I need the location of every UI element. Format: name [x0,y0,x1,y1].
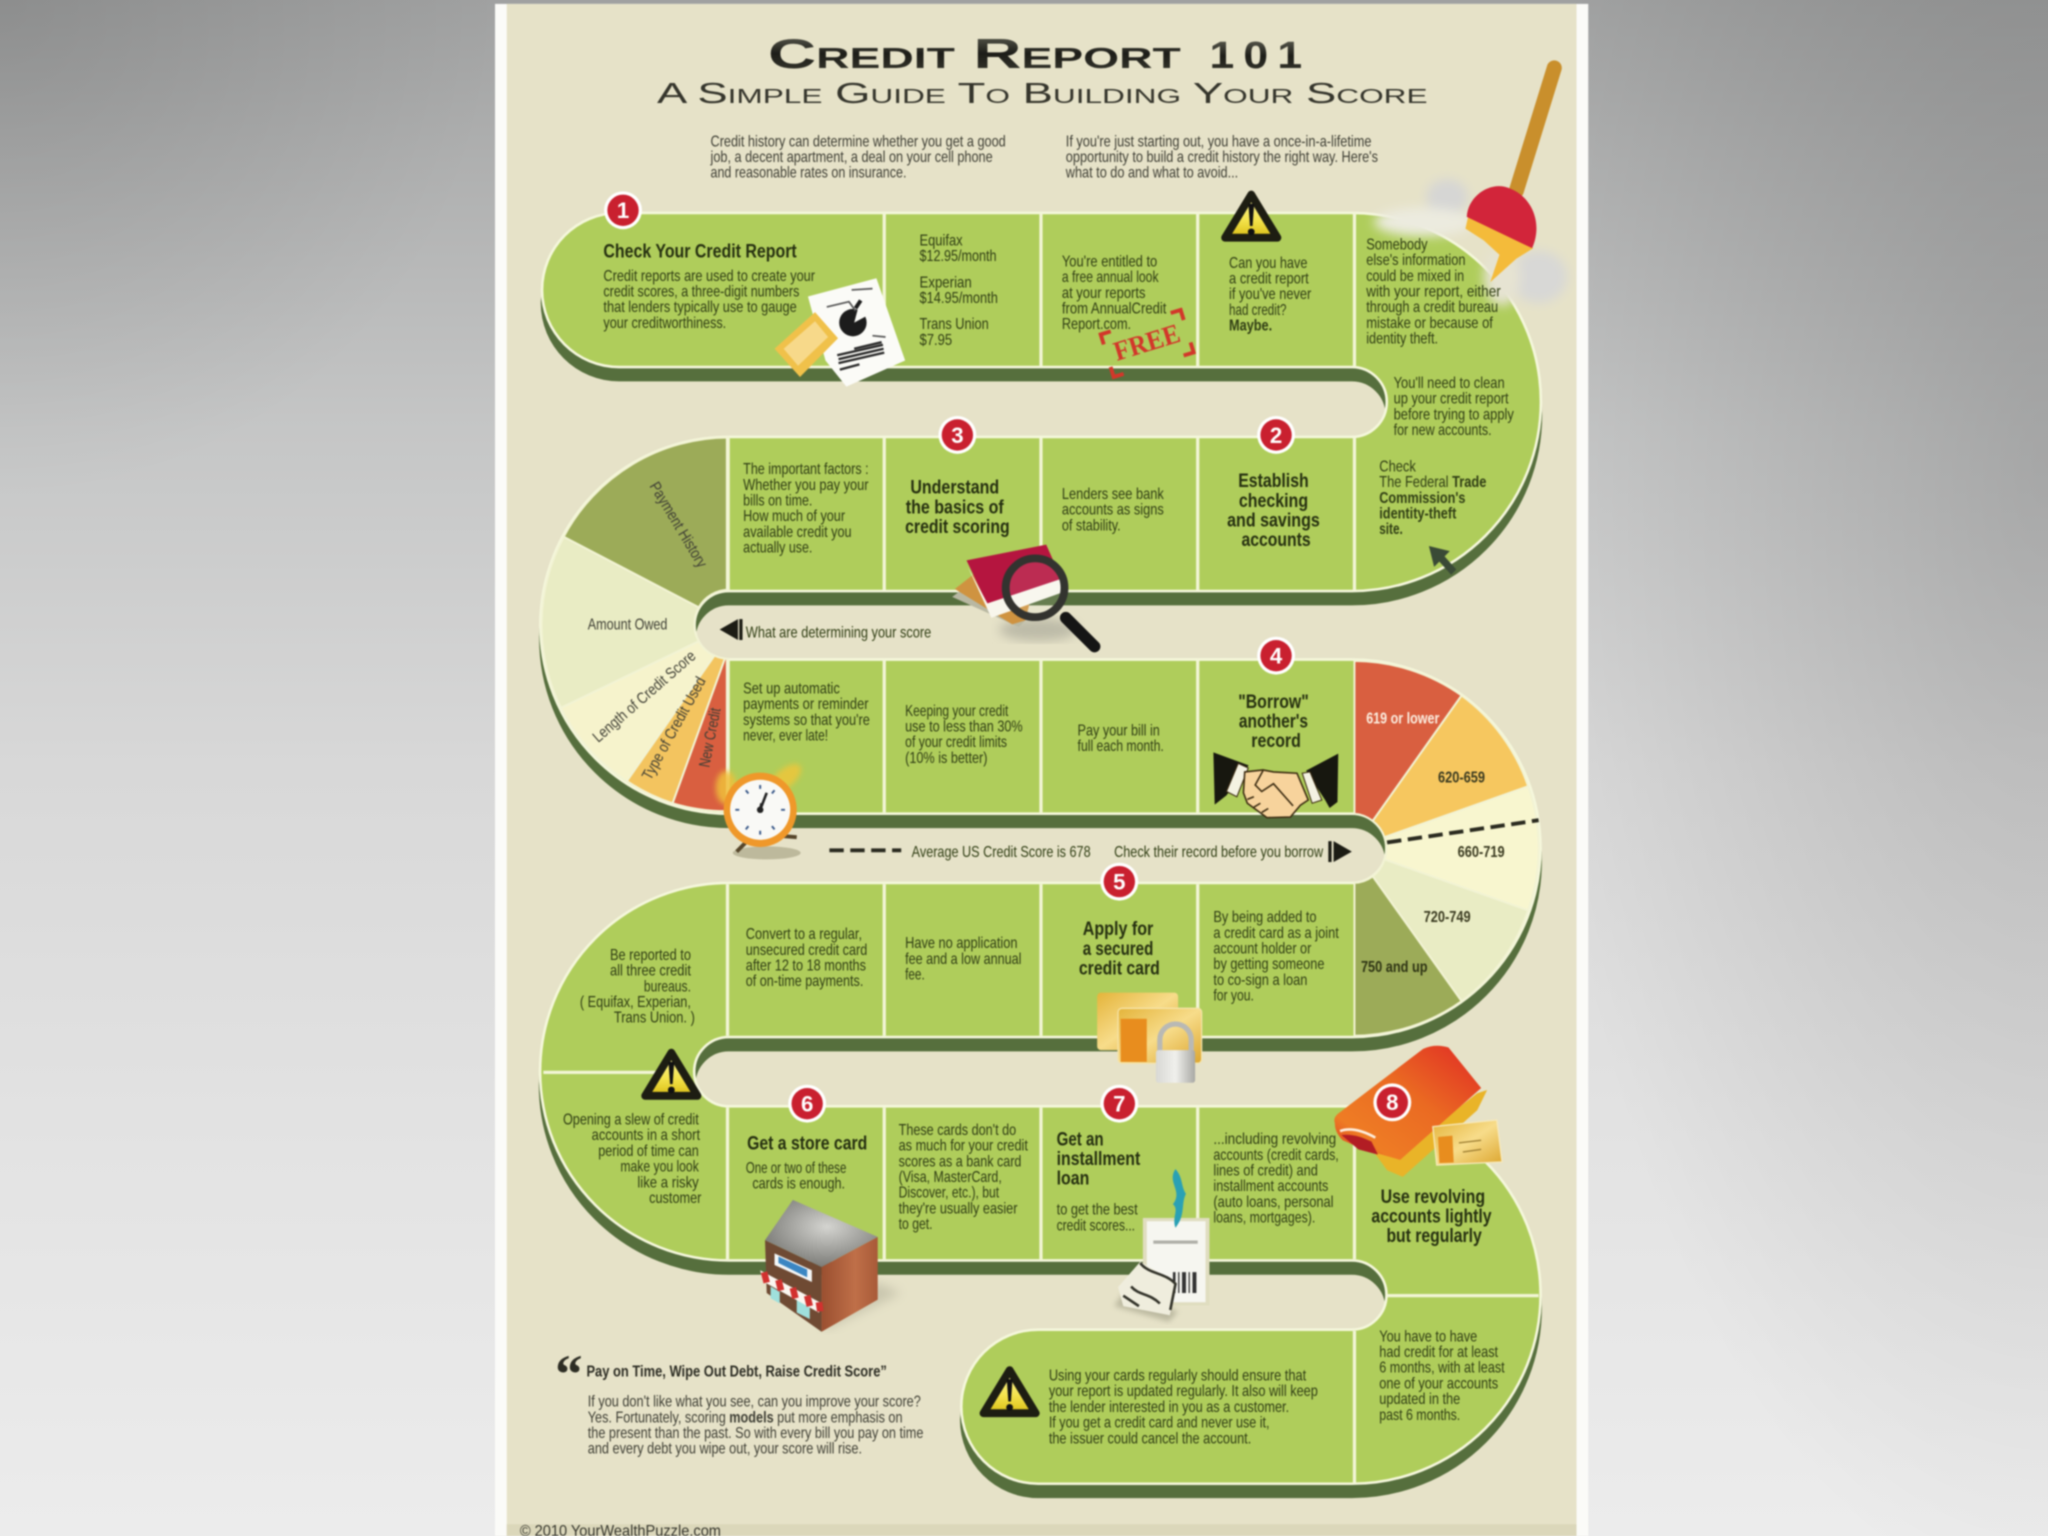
text: store cards vs bank cards: These cards don't do [899,1122,1016,1139]
free annual report text: from AnnualCredit [1062,300,1167,317]
text: credit reports: credit scores, a three-digit numbers [603,283,799,300]
title: Credit Report [768,30,1181,77]
intro text right: opportunity to build a credit history the right way. Here's [1066,149,1378,166]
wedge: payment history [564,438,729,607]
text: opening too many accounts: like a risky [637,1174,699,1191]
icon: cards and padlock [1097,993,1202,1083]
text: joint account holder: By being added to [1213,909,1317,926]
score labels: 750 and up [1361,959,1428,976]
text: federal trade commission [1379,459,1487,538]
wedge: 750 and up [1354,876,1462,1036]
badge 4: 4 [1270,644,1283,669]
text: opening too many accounts: Opening a slew of credit [563,1112,699,1129]
text: keep credit use low: of your credit limits [905,734,1007,751]
text: automatic payments: never, ever late! [743,728,828,745]
text: store cards vs bank cards: Discover, etc.), but [899,1185,1000,1202]
heading: understand the basics of credit scoring: Understand [910,477,999,499]
text: automatic payments: systems so that you're [743,712,870,729]
text: use cards regularly: If you get a credit card and never use it, [1049,1415,1270,1432]
text: one or two: cards is enough. [752,1176,845,1193]
score labels: 619 or lower [1366,711,1439,728]
text: reported to bureaus: all three credit [610,963,691,980]
wedge: 660-719 [1384,786,1539,910]
text: credit reports: that lenders typically use to gauge [603,299,797,316]
heading: get an installment loan [1057,1128,1141,1190]
illustration: broom and dust [1374,68,1567,306]
text: identity mix-up: mistake or because of [1366,315,1493,332]
icon: cursor arrow [1429,546,1456,575]
step 4 [1213,637,1338,818]
text: opening too many accounts [563,1112,701,1207]
text: store cards vs bank cards: (Visa, MasterCard, [899,1169,1002,1186]
pie labels: New Credit [696,706,725,769]
text: clean up report: You'll need to clean [1394,375,1505,392]
heading: apply for a secured credit card: Apply for [1083,918,1154,940]
icon: credit report papers and card [775,278,905,387]
credit bureau prices: $7.95 [920,332,952,349]
pie labels: Length of Credit Score [590,648,700,746]
heading: use revolving accounts lightly but regularly: but regularly [1386,1225,1482,1247]
text: pay in full [1078,722,1164,755]
badge 4 [1257,637,1295,675]
text: reported to bureaus: Trans Union. ) [614,1010,695,1027]
score labels [1361,711,1505,976]
text: keep credit use low: use to less than 30% [905,718,1023,735]
text: convert to regular card: Convert to a regular, [746,926,862,943]
text: keep credit use low [905,703,1023,767]
heading: establish checking and savings accounts: checking [1239,490,1308,512]
pie labels: Amount Owed [588,617,667,634]
text: important factors: How much of your [743,508,845,525]
callout: pay on time quote [555,1343,924,1458]
heading: establish checking and savings accounts: accounts [1241,529,1311,551]
heading: borrow another's record: record [1251,730,1301,752]
text: joint account holder [1213,909,1339,1004]
icon: right arrow [1328,841,1352,862]
quote body [588,1394,924,1458]
text: store cards vs bank cards: to get. [899,1216,933,1233]
wedge: new credit [673,659,729,811]
text: credit report with no credit: Maybe. [1229,317,1272,334]
text: opening too many accounts: accounts in a short [592,1127,701,1144]
text: important factors: bills on time. [743,492,812,509]
text: lenders see bank accounts: accounts as signs [1062,502,1164,519]
icon: warning 1 [1225,195,1277,238]
pie chart: what determines your score [542,438,729,811]
heading: get an installment loan: Get an [1057,1128,1104,1150]
icon: store building [760,1200,901,1332]
pie labels [588,479,725,783]
heading: get a store card: Get a store card [747,1132,867,1154]
text: identity mix-up: with your report, either [1365,283,1501,300]
heading: establish checking and savings accounts [1227,470,1320,551]
text: low fees: fee and a low annual [905,951,1021,968]
average score dashed line [829,820,1539,850]
intro text left: Credit history can determine whether you get a good [711,133,1006,150]
text: store cards vs bank cards: scores as a bank card [899,1153,1021,1170]
intro text left: job, a decent apartment, a deal on your cell phone [710,149,993,166]
text: low fees [905,935,1021,984]
wedge: 720-749 [1373,859,1528,1001]
text: revolving and installment accounts: accounts (credit cards, [1213,1147,1339,1164]
text: important factors: available credit you [743,524,852,541]
heading: establish checking and savings accounts: and savings [1227,509,1320,531]
text: automatic payments [743,681,870,745]
label: check their record: Check their record before you borrow [1114,844,1324,861]
heading: use revolving accounts lightly but regularly: accounts lightly [1371,1206,1492,1228]
step 2 [1227,416,1320,551]
text: six months of history: past 6 months. [1379,1407,1460,1424]
text: best credit scores [1057,1202,1138,1234]
heading: check your credit report: Check Your Credit Report [603,240,797,262]
text: identity mix-up: could be mixed in [1366,268,1464,285]
text: joint account holder: for you. [1213,987,1254,1004]
heading: apply for a secured credit card: credit card [1079,957,1160,979]
badge 2: 2 [1270,423,1282,448]
text: use cards regularly: Using your cards regularly should ensure that [1049,1368,1307,1385]
text: credit report with no credit: Can you have [1229,255,1308,272]
text: joint account holder: a credit card as a joint [1213,925,1339,942]
poster background [495,4,1588,1536]
text: store cards vs bank cards [899,1122,1028,1233]
text: six months of history: had credit for at least [1379,1344,1499,1361]
icon: wallet and card [1334,1046,1502,1177]
score range chart [1354,661,1539,1036]
credit bureau prices: Equifax [920,233,963,250]
serpentine game board [617,290,1464,1420]
icon: books and magnifying glass [952,545,1095,647]
text: lenders see bank accounts [1062,486,1164,534]
heading: understand the basics of credit scoring: the basics of [906,496,1004,518]
text: lenders see bank accounts: Lenders see bank [1062,486,1164,503]
intro text right [1065,133,1378,182]
subtitle: A Simple Guide To Building Your Score [657,78,1428,110]
text: clean up report [1394,375,1514,439]
wedge: length of credit score [561,641,714,781]
wedge: 620-659 [1373,696,1528,837]
heading: apply for a secured credit card: a secured [1083,938,1153,960]
text: store cards vs bank cards: they're usually easier [899,1200,1017,1217]
badge 7 [1100,1085,1138,1123]
text: low fees: Have no application [905,935,1017,952]
pie labels: Type of Credit Used [639,674,710,783]
label: average us credit score: Average US Credit Score is 678 [912,844,1091,861]
icon: alarm clock [716,759,806,859]
intro text left: and reasonable rates on insurance. [711,165,906,182]
pie labels: Payment History [646,479,710,571]
text: revolving and installment accounts [1213,1131,1339,1227]
free annual report text: Report.com. [1062,316,1131,333]
title [768,30,1311,77]
heading: use revolving accounts lightly but regularly: Use revolving [1381,1186,1485,1208]
text: one or two [746,1160,847,1193]
badge 7: 7 [1113,1092,1126,1117]
wedge: type of credit used [627,656,725,803]
stamp: free: FREE [1110,318,1184,367]
icon: receipt and check [1114,1169,1209,1322]
text: joint account holder: account holder or [1213,940,1311,957]
text: opening too many accounts: period of time can [598,1143,699,1160]
text: federal trade commission: site. [1379,521,1403,538]
wedge: 619 or lower [1354,661,1462,821]
text: six months of history: You have to have [1379,1328,1477,1345]
badge 8 [1373,1083,1411,1121]
heading: apply for a secured credit card [1079,918,1160,979]
text: clean up report: for new accounts. [1394,422,1492,439]
icon: left arrow [720,619,743,640]
text: use cards regularly [1049,1368,1318,1447]
step 3 [905,416,1010,538]
quote heading: Pay on Time, Wipe Out Debt, Raise Credit Score” [586,1364,887,1381]
stamp: free [1101,310,1194,377]
credit bureau prices [920,233,998,349]
icon: quotation mark: “ [555,1343,583,1404]
quote body: the present than the past. So with every bill you pay on time [588,1425,924,1442]
text: credit reports: your creditworthiness. [603,315,726,332]
text: identity mix-up: Somebody [1366,236,1428,253]
free annual report text [1062,253,1167,333]
text: six months of history: updated in the [1379,1391,1460,1408]
badge 5 [1100,863,1138,901]
text: clean up report: before trying to apply [1394,406,1514,423]
text: convert to regular card [746,926,867,990]
badge 1: 1 [617,198,629,223]
icon: handshake [1213,752,1338,818]
text: pay in full: full each month. [1078,738,1164,755]
heading: use revolving accounts lightly but regularly [1371,1186,1492,1247]
intro text right: what to do and what to avoid... [1065,165,1238,182]
text: federal trade commission: The Federal Trade [1379,474,1487,491]
free annual report text: You're entitled to [1062,253,1157,270]
step 1 [603,191,905,387]
text: credit report with no credit [1229,255,1311,334]
text: six months of history: 6 months, with at least [1379,1360,1505,1377]
quote body: If you don't like what you see, can you improve your score? [588,1394,921,1411]
text: important factors: The important factors : [743,461,869,478]
text: convert to regular card: of on-time payments. [746,973,863,990]
text: use cards regularly: the lender interested in you as a customer. [1049,1399,1289,1416]
quote body: Yes. Fortunately, scoring models put more emphasis on [588,1409,903,1426]
text: credit reports [603,268,815,332]
heading: get an installment loan: loan [1057,1168,1089,1190]
badge 6: 6 [801,1092,813,1117]
text: identity mix-up [1365,236,1501,348]
score labels: 660-719 [1458,844,1505,861]
step 6 [746,1085,901,1332]
text: federal trade commission: Commission's [1379,490,1466,507]
text: six months of history: one of your accounts [1379,1375,1498,1392]
text: automatic payments: Set up automatic [743,681,840,698]
heading: borrow another's record [1238,691,1309,752]
text: credit report with no credit: if you've never [1229,286,1311,303]
text: best credit scores: credit scores... [1057,1217,1135,1234]
text: reported to bureaus: bureaus. [644,978,691,995]
text: convert to regular card: unsecured credit card [746,942,867,959]
step 5 [1079,863,1202,1083]
text: low fees: fee. [905,967,925,984]
text: use cards regularly: the issuer could cancel the account. [1049,1430,1251,1447]
heading: borrow another's record: "Borrow" [1238,691,1309,713]
score labels: 720-749 [1424,909,1471,926]
heading: borrow another's record: another's [1239,711,1308,733]
text: revolving and installment accounts: lines of credit) and [1213,1163,1318,1180]
text: federal trade commission: Check [1379,459,1416,476]
text: pay in full: Pay your bill in [1078,722,1160,739]
text: credit reports: Credit reports are used to create your [603,268,815,285]
heading: understand the basics of credit scoring [905,477,1010,538]
label: what are determining your score: What are determining your score [746,624,931,641]
text: reported to bureaus [580,947,695,1027]
text: keep credit use low: Keeping your credit [905,703,1009,720]
credit bureau prices: $14.95/month [920,290,998,307]
text: joint account holder: to co-sign a loan [1213,972,1307,989]
text: keep credit use low: (10% is better) [905,750,987,767]
badge 1 [604,191,642,229]
badge 6 [788,1085,826,1123]
credit bureau prices: Trans Union [920,316,989,333]
free annual report text: a free annual look [1062,269,1159,286]
text: credit report with no credit: a credit report [1229,270,1309,287]
text: identity mix-up: through a credit bureau [1366,299,1498,316]
text: federal trade commission: identity-theft [1379,506,1457,523]
text: convert to regular card: after 12 to 18 months [746,957,866,974]
intro text left [710,133,1006,182]
badge 5: 5 [1113,869,1126,894]
text: automatic payments: payments or reminder [743,696,869,713]
credit bureau prices: Experian [920,274,972,291]
wedge: amount owed [542,537,699,708]
free annual report text: at your reports [1062,285,1146,302]
text: important factors: actually use. [743,539,812,556]
heading: get an installment loan: installment [1057,1148,1141,1170]
step 8 [1334,1046,1502,1247]
text: revolving and installment accounts: installment accounts [1213,1178,1328,1195]
heading: understand the basics of credit scoring: credit scoring [905,516,1010,538]
text: joint account holder: by getting someone [1213,956,1325,973]
badge 8: 8 [1386,1090,1398,1115]
score labels: 620-659 [1438,769,1485,786]
badge 3: 3 [951,423,964,448]
text: reported to bureaus: ( Equifax, Experian, [580,994,691,1011]
heading: establish checking and savings accounts: Establish [1238,470,1309,492]
text: opening too many accounts: customer [649,1190,701,1207]
quote body: and every debt you wipe out, your score will rise. [588,1441,862,1458]
text: revolving and installment accounts: ...including revolving [1213,1131,1336,1148]
text: identity mix-up: identity theft. [1366,331,1438,348]
icon: warning 3 [984,1370,1036,1413]
text: important factors: Whether you pay your [743,477,869,494]
text: six months of history [1379,1328,1505,1424]
text: credit report with no credit: had credit? [1229,302,1287,319]
text: clean up report: up your credit report [1394,391,1509,408]
text: store cards vs bank cards: as much for your credit [899,1138,1028,1155]
intro text right: If you're just starting out, you have a once-in-a-lifetime [1066,133,1372,150]
text: best credit scores: to get the best [1057,1202,1138,1219]
step 7 [1057,1085,1209,1322]
text: important factors [743,461,869,556]
text: identity mix-up: else's information [1366,252,1465,269]
title: 101 [1209,35,1311,77]
text: use cards regularly: your report is updated regularly. It also will keep [1049,1383,1318,1400]
text: reported to bureaus: Be reported to [610,947,691,964]
text: opening too many accounts: make you look [620,1159,699,1176]
text: one or two: One or two of these [746,1160,847,1177]
text: revolving and installment accounts: loans, mortgages). [1213,1210,1315,1227]
text: revolving and installment accounts: (auto loans, personal [1213,1194,1334,1211]
icon: warning 2 [645,1053,697,1096]
text: lenders see bank accounts: of stability. [1062,517,1121,534]
credit bureau prices: $12.95/month [920,248,997,265]
